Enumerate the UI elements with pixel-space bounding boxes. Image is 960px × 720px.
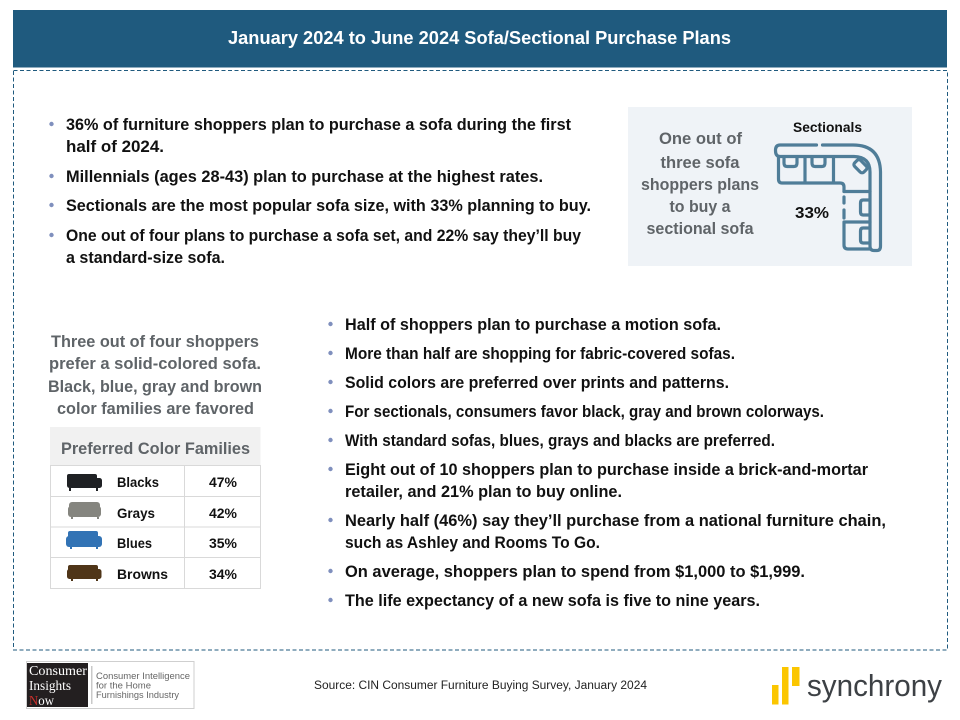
text block: main findings bullets: Solid colors are preferred over prints and patterns.	[345, 374, 729, 392]
text block: color preference summary: prefer a solid-colored sofa.	[49, 354, 261, 373]
table heading: Preferred Color Families	[61, 439, 250, 458]
text block: main findings bullets: such as Ashley and Rooms To Go.	[345, 534, 600, 552]
text block: main findings bullets	[328, 316, 886, 610]
row: Browns	[67, 565, 238, 582]
logo: Consumer Insights Now: Consumer Intelligence	[96, 671, 190, 682]
logo: Consumer Insights Now: for the Home	[96, 680, 151, 692]
text block: main findings bullets: The life expectancy of a new sofa is five to nine years.	[345, 592, 760, 610]
text block: top summary bullets: One out of four plans to purchase a sofa set, and 22% say they’ll buy	[66, 227, 582, 245]
title banner: January 2024 to June 2024 Sofa/Sectional Purchase Plans	[228, 28, 731, 48]
callout text: shoppers plans	[641, 175, 759, 194]
text block: main findings bullets: With standard sofas, blues, grays and blacks are preferred.	[345, 432, 775, 450]
callout text: One out of	[659, 129, 742, 148]
dashed content frame	[14, 70, 948, 650]
row: Grays: 42%	[209, 505, 238, 521]
text block: main findings bullets: On average, shoppers plan to spend from $1,000 to $1,999.	[345, 563, 805, 581]
source note: Source: CIN Consumer Furniture Buying Survey, January 2024	[314, 680, 648, 692]
text block: top summary bullets	[49, 116, 591, 267]
logo: Consumer Insights Now: Furnishings Industry	[96, 690, 179, 701]
row: Browns: Browns	[117, 566, 168, 582]
title banner	[13, 10, 947, 68]
logo: Consumer Insights Now: Now	[29, 694, 55, 709]
label: Sectionals: Sectionals	[793, 119, 862, 135]
callout text: sectional sofa	[646, 219, 754, 238]
text block: main findings bullets: Half of shoppers plan to purchase a motion sofa.	[345, 316, 721, 334]
text block: top summary bullets: half of 2024.	[66, 138, 164, 156]
text block: main findings bullets: For sectionals, consumers favor black, gray and brown colorways.	[345, 403, 824, 421]
stat: 33%: 33%	[795, 205, 829, 222]
logo: Consumer Insights Now: Insights	[29, 679, 71, 694]
text block: top summary bullets: Millennials (ages 28-43) plan to purchase at the highest rates.	[66, 168, 543, 186]
row: Blacks	[67, 474, 238, 491]
row: Blacks: Blacks	[117, 474, 159, 490]
row: Blacks: 47%	[209, 474, 238, 490]
row: Blues: Blues	[117, 535, 152, 551]
text block: color preference summary: Three out of four shoppers	[51, 332, 259, 351]
text block: color preference summary: Black, blue, gray and brown	[48, 377, 262, 396]
text block: color preference summary	[48, 332, 262, 418]
row: Blues	[66, 531, 238, 551]
callout text	[641, 129, 759, 238]
row: Grays: Grays	[117, 505, 155, 521]
callout text: to buy a	[670, 197, 731, 216]
callout text: three sofa	[660, 153, 740, 172]
text block: main findings bullets: retailer, and 21% plan to buy online.	[345, 483, 622, 501]
row: Browns: 34%	[209, 566, 238, 582]
text block: top summary bullets: a standard-size sofa.	[66, 249, 225, 267]
logo: Consumer Insights Now: Consumer	[29, 664, 87, 679]
icon: sectional sofa	[776, 145, 880, 250]
table: preferred color families	[50, 427, 260, 589]
text block: top summary bullets: Sectionals are the most popular sofa size, with 33% planning to buy.	[66, 197, 591, 215]
logo: Consumer Insights Now	[26, 662, 194, 709]
row: Grays	[68, 502, 238, 521]
text block: main findings bullets: Nearly half (46%) say they’ll purchase from a national furniture chain,	[345, 512, 886, 530]
text block: top summary bullets: 36% of furniture shoppers plan to purchase a sofa during the first	[66, 116, 571, 134]
panel: sectionals callout	[628, 107, 912, 266]
text block: color preference summary: color families are favored	[57, 399, 254, 418]
row: Blues: 35%	[209, 535, 238, 551]
logo: Synchrony: synchrony	[807, 668, 942, 703]
text block: main findings bullets: More than half are shopping for fabric-covered sofas.	[345, 345, 735, 363]
text block: main findings bullets: Eight out of 10 shoppers plan to purchase inside a brick-and-mortar	[345, 461, 869, 479]
